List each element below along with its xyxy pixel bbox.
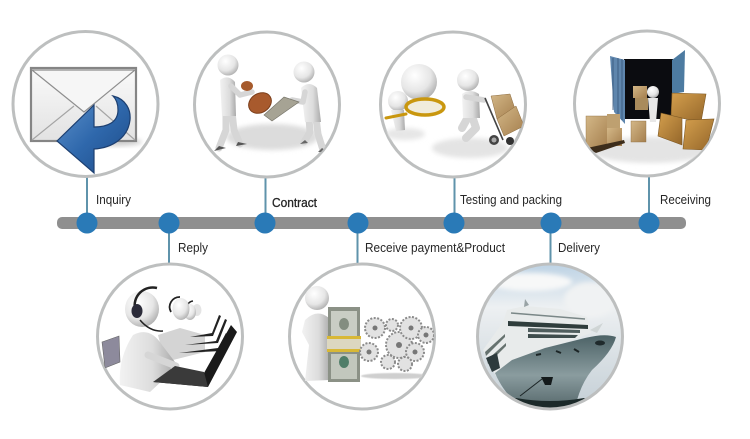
illustration: call center agents	[102, 287, 237, 392]
ship photo	[476, 263, 624, 411]
label: Inquiry: Inquiry	[96, 193, 132, 207]
icon: envelope	[31, 68, 142, 146]
circle frame	[194, 32, 340, 177]
timeline bar	[57, 217, 686, 229]
small figure	[388, 91, 408, 131]
cardboard boxes	[491, 94, 524, 136]
label: Receiving: Receiving	[660, 193, 711, 207]
illustration: figure, money, gears	[302, 286, 434, 382]
label: Contract: Contract	[272, 196, 317, 210]
shipping container	[610, 50, 685, 124]
circle frame	[98, 264, 242, 409]
figure	[302, 286, 330, 381]
superstructure	[483, 340, 570, 376]
main agent	[120, 287, 176, 392]
sea	[515, 398, 585, 408]
step: Contract	[194, 32, 340, 177]
step: Reply	[98, 264, 242, 409]
icon: blue reply arrow	[57, 96, 130, 173]
illustration: inspection and hand truck	[385, 64, 524, 158]
worker and box stack	[631, 86, 659, 142]
step: Receive payment & Product	[290, 264, 434, 409]
label: Reply: Reply	[178, 241, 209, 255]
main laptop	[153, 325, 237, 387]
illustration: container and crates	[586, 50, 714, 163]
circle frame	[13, 32, 158, 176]
hull details	[486, 353, 500, 372]
circle frame	[478, 264, 622, 409]
illustration: two figures with stamp	[214, 54, 328, 152]
circle frame	[380, 32, 526, 177]
background laptops	[179, 315, 228, 353]
figure with hand truck	[457, 69, 484, 138]
step: Inquiry	[13, 32, 158, 176]
step: Testing and packing	[380, 32, 526, 177]
step: Delivery	[476, 263, 624, 411]
monitor	[102, 336, 120, 368]
background agents	[158, 297, 205, 362]
timeline dots	[76, 212, 660, 234]
label: Delivery: Delivery	[558, 241, 601, 255]
step: Receiving	[574, 31, 720, 176]
golden magnifier	[386, 99, 444, 118]
money stack	[327, 307, 361, 382]
hull	[495, 335, 616, 408]
connector stems	[87, 177, 649, 264]
wooden crates	[658, 93, 714, 150]
gears	[360, 317, 434, 371]
magnifier head	[401, 64, 437, 100]
label: Testing and packing: Testing and packing	[460, 193, 562, 207]
label: Receive payment & Product: Receive payment&Product	[365, 241, 505, 255]
circle frame	[290, 264, 434, 409]
circle frame	[574, 31, 720, 176]
pallet boxes	[586, 114, 625, 153]
